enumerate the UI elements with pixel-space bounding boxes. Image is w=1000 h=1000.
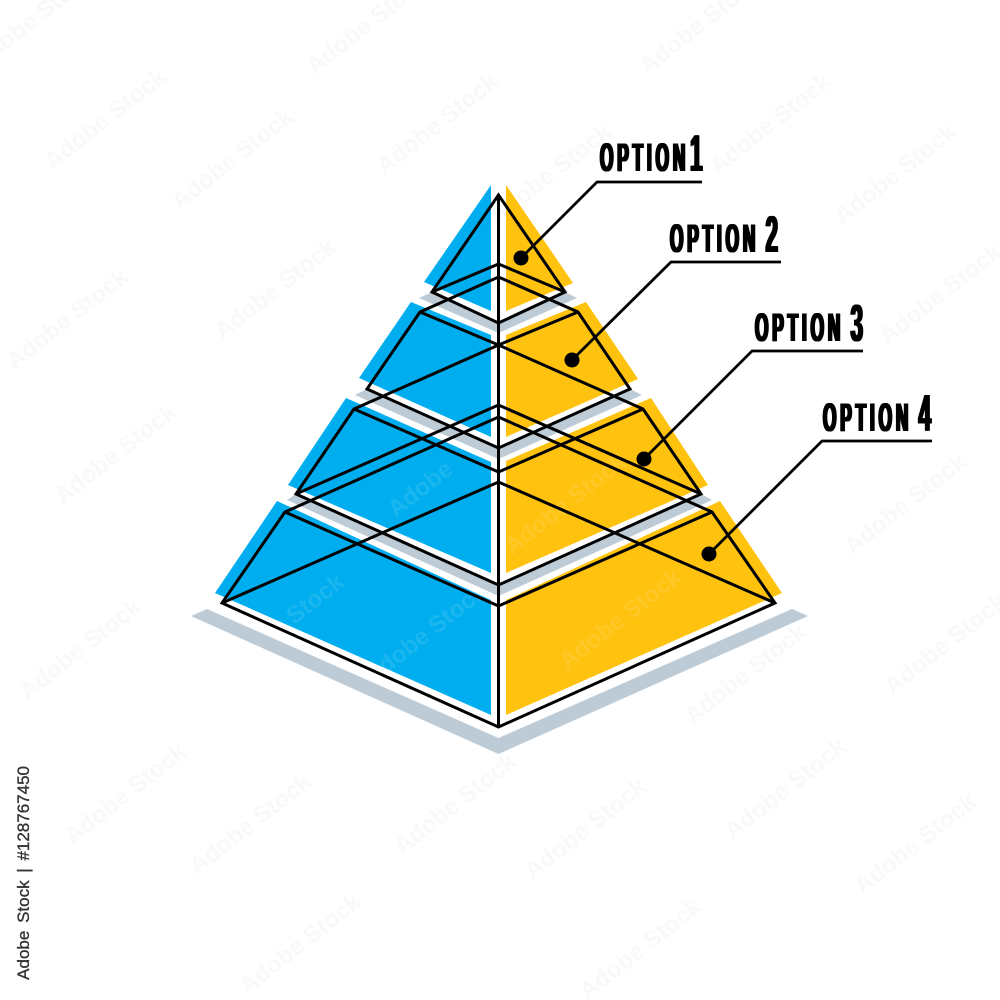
stock watermark: Adobe Stock <box>59 738 192 850</box>
stock watermark: Adobe Stock <box>49 398 182 510</box>
stock watermark: Adobe Stock <box>1 263 134 375</box>
stock watermark: Adobe Stock <box>234 888 367 1000</box>
stock watermark: Adobe Stock <box>371 68 504 180</box>
watermark over faces <box>281 448 687 690</box>
callout leader 3 <box>636 351 863 466</box>
pyramid wireframe <box>222 195 775 727</box>
tier 3 wireframe <box>296 345 701 585</box>
stock watermark: Adobe Stock <box>184 768 317 880</box>
stock watermark: Adobe Stock <box>39 63 172 175</box>
stock watermark: Adobe Stock <box>704 68 837 180</box>
stock watermark: Adobe Stock <box>829 118 962 230</box>
shadow bands <box>191 292 808 754</box>
label: option 1: OPTION1 <box>600 125 706 183</box>
stock watermark: Adobe Stock <box>209 233 342 345</box>
stock watermark: Adobe Stock <box>719 733 852 845</box>
callout leader 1 <box>514 182 702 266</box>
stock watermark: Adobe Stock <box>166 103 299 215</box>
callout leader 4 <box>702 441 932 562</box>
watermark over faces: Adobe Stock <box>499 448 632 560</box>
callout leader 2 <box>564 262 781 368</box>
tier 1 wireframe <box>432 195 565 323</box>
stock watermark: Adobe Stock <box>14 593 147 705</box>
stock id label: Adobe Stock | #128767450 <box>14 766 33 980</box>
tier 4 wireframe <box>222 417 775 727</box>
stock watermark: Adobe Stock <box>389 748 522 860</box>
label: option 2: OPTION2 <box>670 206 782 264</box>
stock watermark: Adobe Stock <box>484 118 617 230</box>
stock watermark: Adobe Stock <box>839 448 972 560</box>
label: option 3: OPTION3 <box>755 295 867 353</box>
stock watermark: Adobe Stock <box>679 618 812 730</box>
stock watermark: Adobe Stock <box>849 788 982 900</box>
watermark over faces: Adobe Stock <box>359 578 492 690</box>
watermark over faces: Adobe <box>383 455 458 523</box>
blue left faces <box>215 185 491 715</box>
tier 2 wireframe <box>367 277 630 448</box>
watermark over faces: Stock <box>281 568 350 630</box>
yellow right faces <box>506 185 782 715</box>
center edge <box>497 195 500 727</box>
watermark over faces: Adobe Stock <box>554 563 687 675</box>
stock watermark: Adobe Stock <box>519 773 652 885</box>
label: option 4: OPTION4 <box>823 385 935 443</box>
